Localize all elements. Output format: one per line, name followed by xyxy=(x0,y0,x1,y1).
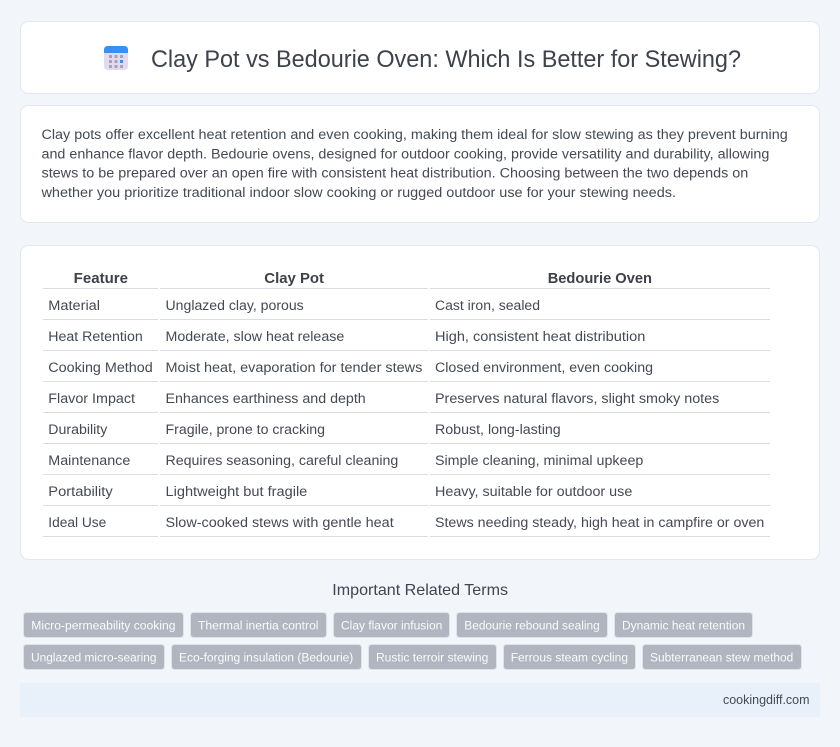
tag list: related terms: Unglazed micro-searing xyxy=(31,650,156,664)
table row: ideal use: Slow-cooked stews with gentle heat xyxy=(166,515,394,531)
table row: maintenance: Simple cleaning, minimal upkeep xyxy=(435,453,643,469)
table row: flavor impact xyxy=(48,391,719,407)
table row: durability: Robust, long-lasting xyxy=(435,422,561,438)
tag list: related terms: Dynamic heat retention xyxy=(622,618,745,632)
table row: cooking method: Closed environment, even cooking xyxy=(435,360,653,376)
table row: heat retention: High, consistent heat distribution xyxy=(435,329,645,345)
table row: heat retention: Heat Retention xyxy=(48,329,143,345)
text block: summary paragraph xyxy=(40,127,788,201)
table row: cooking method: Cooking Method xyxy=(48,360,153,376)
table header row: Feature xyxy=(74,270,128,287)
table row: material: Material xyxy=(48,298,100,314)
tag list: related terms: Subterranean stew method xyxy=(650,650,793,664)
table row: maintenance: Maintenance xyxy=(48,453,130,469)
table header row: Clay Pot xyxy=(264,270,324,287)
table row: material xyxy=(48,298,540,314)
table row: portability: Lightweight but fragile xyxy=(166,484,307,500)
table row: flavor impact: Preserves natural flavors, slight smoky notes xyxy=(435,391,719,407)
panel: introduction xyxy=(20,106,820,222)
tag list: related terms: Ferrous steam cycling xyxy=(511,650,628,664)
table row: portability: Portability xyxy=(48,484,114,500)
panel: header xyxy=(20,22,820,94)
table row: cooking method xyxy=(48,360,653,376)
footer source text: cookingdiff.com xyxy=(723,692,810,707)
heading: related terms: Important Related Terms xyxy=(332,582,508,599)
table row: heat retention xyxy=(48,329,645,345)
tag list: related terms: Rustic terroir stewing xyxy=(376,650,488,664)
text block: summary paragraph: stews to be prepared over an open fire with consistent heat distribution. Choosing between the two depends on xyxy=(42,166,748,182)
table row: durability: Fragile, prone to cracking xyxy=(166,422,325,438)
text block: summary paragraph: whether you prioritize traditional indoor slow cooking or rugged outdoor use for your stewing needs. xyxy=(40,185,676,201)
text block: summary paragraph: Clay pots offer excellent heat retention and even cooking, making them ideal for slow stewing as they prevent burning xyxy=(42,127,788,143)
table row: material: Unglazed clay, porous xyxy=(166,298,304,314)
table header row xyxy=(74,270,652,287)
table row: durability xyxy=(48,422,561,438)
table row: cooking method: Moist heat, evaporation for tender stews xyxy=(166,360,422,376)
table row: ideal use: Ideal Use xyxy=(48,515,106,531)
table header row: Bedourie Oven xyxy=(548,270,652,287)
panel: comparison table xyxy=(20,246,820,560)
table row: flavor impact: Enhances earthiness and depth xyxy=(166,391,366,407)
icon: calendar xyxy=(104,46,128,70)
text block: summary paragraph: and enhance flavor depth. Bedourie ovens, designed for outdoor cooking, provide versatility and durability, allowing xyxy=(42,146,769,162)
table row: ideal use xyxy=(48,515,764,531)
table row: portability: Heavy, suitable for outdoor use xyxy=(435,484,632,500)
table row: maintenance xyxy=(48,453,643,469)
table row: durability: Durability xyxy=(48,422,108,438)
tag list: related terms: Micro-permeability cooking xyxy=(31,618,175,632)
table row: heat retention: Moderate, slow heat release xyxy=(166,329,344,345)
table row: flavor impact: Flavor Impact xyxy=(48,391,135,407)
table row: ideal use: Stews needing steady, high heat in campfire or oven xyxy=(435,515,764,531)
tag list: related terms: Bedourie rebound sealing xyxy=(464,618,600,632)
tag list: related terms: Thermal inertia control xyxy=(198,618,318,632)
title: Clay Pot vs Bedourie Oven: Which Is Better for Stewing? xyxy=(151,46,741,73)
tag list: related terms: Eco-forging insulation (Bedourie) xyxy=(179,650,353,664)
table row: material: Cast iron, sealed xyxy=(435,298,540,314)
table row: portability xyxy=(48,484,632,500)
tag list: related terms xyxy=(24,612,802,670)
table row: maintenance: Requires seasoning, careful cleaning xyxy=(166,453,398,469)
tag list: related terms: Clay flavor infusion xyxy=(341,618,442,632)
footer xyxy=(20,683,820,717)
